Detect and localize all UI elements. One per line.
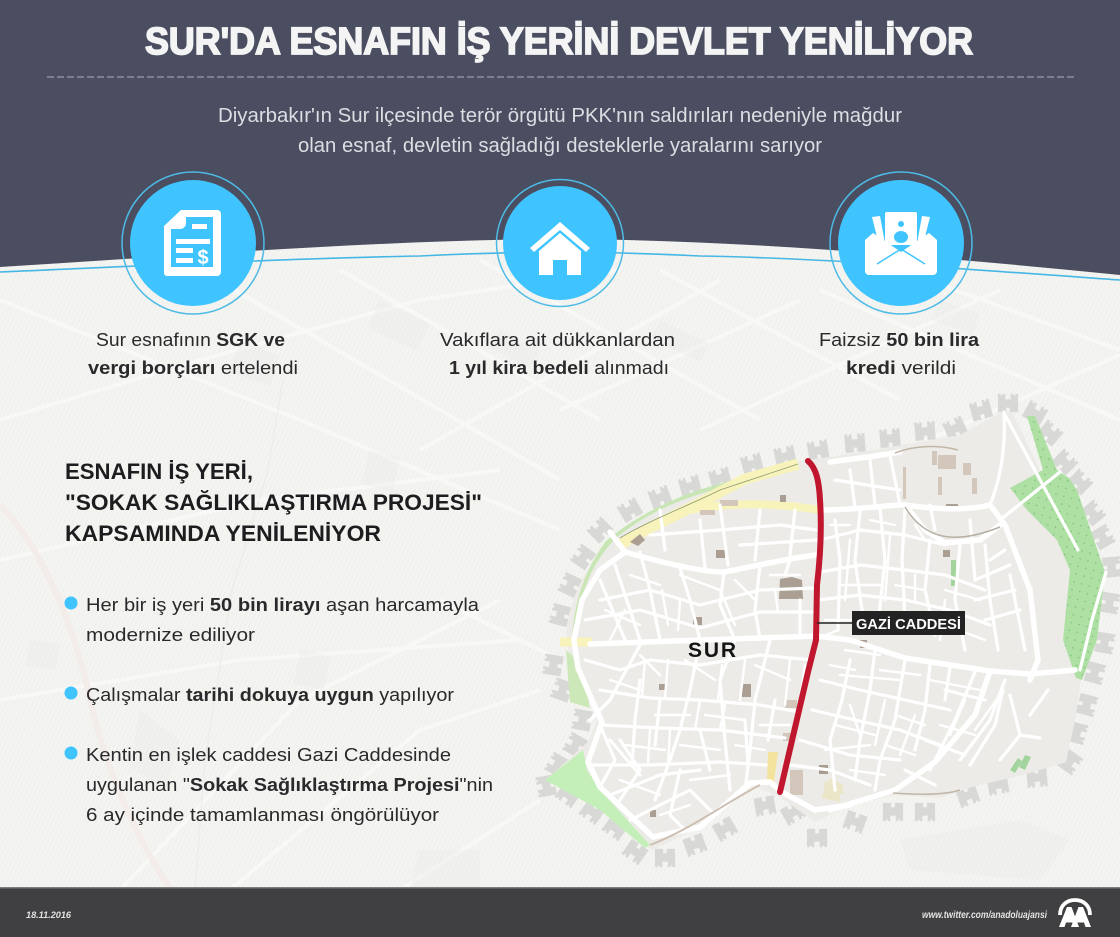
section heading [65, 459, 482, 546]
bullet: cost [64, 595, 480, 645]
subtitle [218, 105, 902, 157]
section heading: ESNAFIN İŞ YERİ, [65, 459, 253, 484]
icon: house [496, 180, 624, 306]
bullet: schedule: Kentin en işlek caddesi Gazi Caddesinde [86, 745, 451, 765]
caption: rent: 1 yıl kira bedeli alınmadı [449, 358, 669, 378]
caption: rent [440, 330, 675, 378]
subtitle: olan esnaf, devletin sağladığı desteklerle yaralarını sarıyor [298, 135, 822, 157]
icon: money envelope [830, 172, 972, 314]
label: Gazi Caddesi: GAZİ CADDESİ [856, 616, 961, 633]
street network [574, 412, 1106, 837]
icon: AA logo [1059, 900, 1091, 927]
map: Sur district [535, 394, 1120, 867]
caption: credit: Faizsiz 50 bin lira [819, 330, 980, 350]
title: SUR'DA ESNAFIN İŞ YERİNİ DEVLET YENİLİYOR [145, 21, 973, 63]
caption: tax debts [88, 330, 298, 378]
bullet: cost: modernize ediliyor [86, 625, 255, 645]
label: Sur: SUR [688, 639, 736, 662]
caption: credit [819, 330, 980, 378]
bullet: schedule [64, 745, 493, 825]
bullet: historic fabric: Çalışmalar tarihi dokuya uygun yapılıyor [86, 685, 454, 705]
old town base [546, 412, 1106, 850]
bullet: cost: Her bir iş yeri 50 bin lirayı aşan harcamayla [86, 595, 480, 615]
caption: rent: Vakıflara ait dükkanlardan [440, 330, 675, 350]
wall lines [620, 447, 1000, 845]
section heading: KAPSAMINDA YENİLENİYOR [65, 521, 381, 546]
icon: tax document [122, 172, 264, 314]
route: Gazi Caddesi [780, 461, 821, 792]
green areas [545, 416, 1105, 848]
date: 18.11.2016 [26, 910, 72, 921]
bullet: schedule: 6 ay içinde tamamlanması öngörülüyor [86, 805, 439, 825]
header band [0, 0, 1120, 280]
caption: tax debts: Sur esnafının SGK ve [96, 330, 285, 350]
footer bar [0, 887, 1120, 937]
castle wall towers [535, 394, 1120, 867]
bullet: schedule: uygulanan " Sokak Sağlıklaştırma Projesi "nin [86, 775, 493, 795]
label: Gazi Caddesi [817, 611, 965, 635]
social link: www.twitter.com/anadoluajansi [922, 909, 1048, 921]
buildings [630, 451, 977, 817]
yellow main roads [560, 464, 820, 642]
caption: credit: kredi verildi [846, 358, 956, 378]
icon: tax document: $ [197, 247, 209, 269]
subtitle: Diyarbakır'ın Sur ilçesinde terör örgütü PKK'nın saldırıları nedeniyle mağdur [218, 105, 902, 127]
section heading: "SOKAK SAĞLIKLAŞTIRMA PROJESİ" [65, 490, 482, 515]
caption: tax debts: vergi borçları ertelendi [88, 358, 298, 378]
